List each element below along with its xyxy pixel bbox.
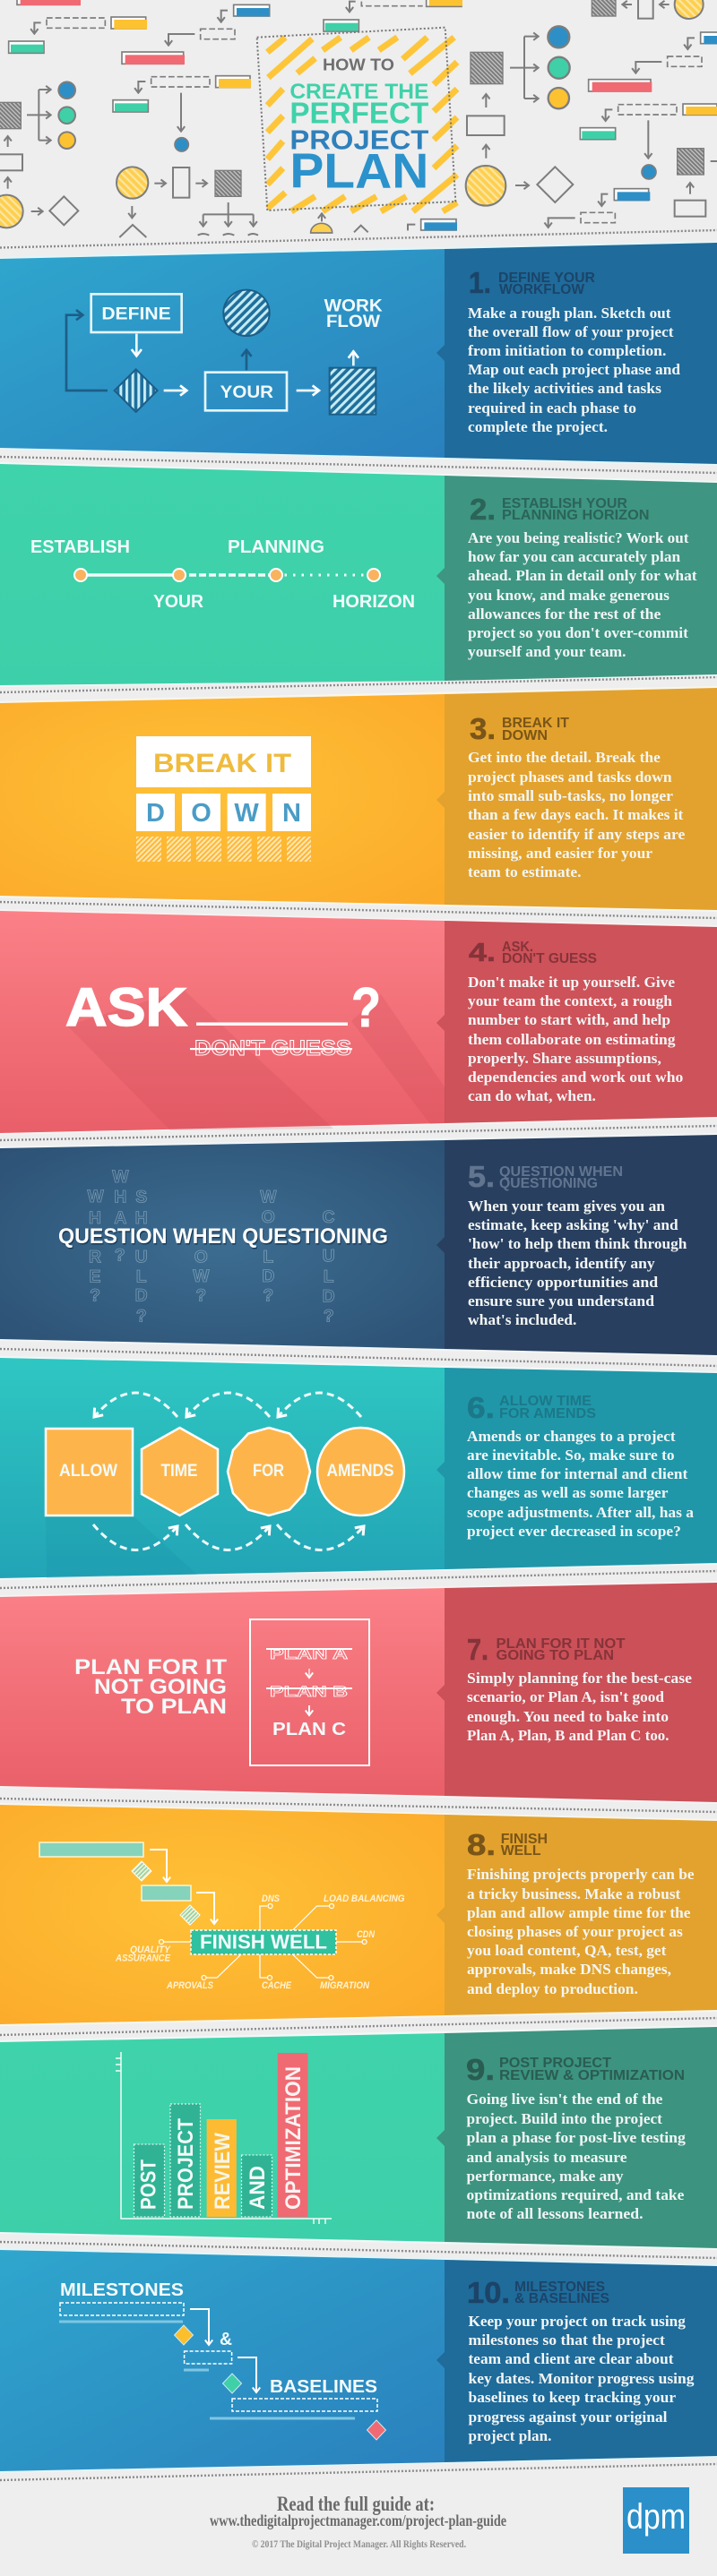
heading: WELL bbox=[501, 1843, 541, 1859]
heading: 6. bbox=[467, 1391, 495, 1424]
heading text: PLAN bbox=[289, 143, 428, 198]
outlined question words: W bbox=[260, 1189, 277, 1207]
body text: into small sub-tasks, no longer bbox=[468, 787, 673, 804]
workflow diagram: YOUR bbox=[220, 383, 273, 402]
body text bbox=[468, 305, 681, 435]
outlined question words: ? bbox=[195, 1287, 206, 1306]
outlined question words: E bbox=[90, 1268, 101, 1287]
panel 4: ask, don't guess bbox=[0, 911, 717, 1133]
outlined question words: R bbox=[89, 1248, 101, 1267]
outlined question words: ? bbox=[115, 1247, 125, 1266]
panel 10: milestones and baselines bbox=[0, 2250, 717, 2471]
body text: changes as well as some larger bbox=[467, 1484, 669, 1501]
callout notch bbox=[436, 1684, 445, 1702]
plan card: PLAN C bbox=[272, 1720, 346, 1739]
outlined question words: ? bbox=[263, 1287, 273, 1306]
callout notch bbox=[436, 344, 445, 362]
body text: yourself and your team. bbox=[468, 643, 626, 660]
outlined question words: ? bbox=[90, 1287, 100, 1306]
heading: QUESTIONING bbox=[499, 1176, 598, 1191]
heading: 7. bbox=[467, 1633, 488, 1666]
long shadow bbox=[46, 1516, 197, 1578]
panel 3: break it down bbox=[0, 688, 717, 910]
body text: them collaborate on estimating bbox=[468, 1031, 676, 1048]
outlined question words: D bbox=[323, 1287, 335, 1306]
workflow diagram: WORK bbox=[324, 297, 383, 316]
ask graphic: ? bbox=[351, 977, 381, 1039]
milestones diagram bbox=[59, 2280, 385, 2440]
outlined question words: U bbox=[135, 1248, 148, 1267]
outlined question words: L bbox=[324, 1268, 334, 1287]
outlined question words: W bbox=[112, 1168, 129, 1187]
body text: you load content, QA, test, get bbox=[467, 1942, 667, 1959]
panel 5: question when questioning bbox=[0, 1135, 717, 1355]
top connector shapes bbox=[324, 0, 462, 31]
body text: allowances for the rest of the bbox=[468, 605, 661, 623]
body text: dependencies and work out who bbox=[468, 1069, 683, 1086]
title block bbox=[257, 0, 462, 233]
milestones diagram: MILESTONES bbox=[60, 2280, 184, 2300]
outlined question words: O bbox=[262, 1208, 275, 1227]
body text bbox=[468, 529, 697, 660]
callout notch bbox=[436, 1236, 445, 1254]
heading: FINISH bbox=[501, 1832, 548, 1847]
timeline: HORIZON bbox=[333, 592, 415, 612]
heading: PLAN FOR IT NOT bbox=[497, 1636, 626, 1652]
heading bbox=[470, 712, 569, 745]
body text: estimate, keep asking 'why' and bbox=[468, 1216, 678, 1233]
heading bbox=[467, 1633, 626, 1666]
body text: ahead. Plan in detail only for what bbox=[468, 567, 697, 584]
body text: ensure sure you understand bbox=[468, 1292, 655, 1309]
finish well mind map: DNS bbox=[262, 1893, 281, 1904]
headline: QUESTION WHEN QUESTIONING bbox=[58, 1224, 388, 1249]
body text: Going live isn't the end of the bbox=[466, 2091, 663, 2108]
body text: their approach, identify any bbox=[468, 1255, 655, 1272]
finish well mind map: FINISH WELL bbox=[200, 1931, 327, 1953]
bar: optimization: OPTIMIZATION bbox=[281, 2066, 306, 2210]
shape: time bbox=[142, 1428, 218, 1516]
body text bbox=[468, 749, 686, 880]
panel 6: allow time for amends bbox=[0, 1358, 717, 1578]
callout notch bbox=[436, 2351, 445, 2369]
heading: DEFINE YOUR bbox=[498, 270, 595, 286]
break it down graphic: N bbox=[282, 799, 301, 828]
finish well mind map: LOAD BALANCING bbox=[324, 1893, 405, 1904]
outlined question words: S bbox=[135, 1189, 147, 1207]
ask graphic: ASK bbox=[65, 977, 187, 1037]
body text: complete the project. bbox=[468, 418, 608, 435]
body text: optimizations required, and take bbox=[466, 2186, 685, 2203]
finish well mind map: CDN bbox=[357, 1929, 376, 1940]
body text bbox=[466, 2091, 686, 2222]
body text: key dates. Monitor progress using bbox=[468, 2370, 695, 2387]
heading: & BASELINES bbox=[514, 2291, 609, 2306]
heading: DON'T GUESS bbox=[502, 951, 597, 966]
body text: Simply planning for the best-case bbox=[467, 1670, 692, 1687]
heading: DOWN bbox=[502, 728, 548, 743]
heading text: CREATE THE bbox=[289, 80, 428, 104]
body text: from initiation to completion. bbox=[468, 342, 666, 359]
callout notch bbox=[436, 567, 445, 585]
outlined question words: L bbox=[263, 1248, 273, 1267]
outlined question words: ? bbox=[324, 1308, 334, 1327]
timeline: YOUR bbox=[153, 592, 204, 612]
body text: Make a rough plan. Sketch out bbox=[468, 305, 671, 322]
body text: progress against your original bbox=[468, 2409, 668, 2426]
body text: the overall flow of your project bbox=[468, 323, 674, 340]
heading: QUESTION WHEN bbox=[499, 1164, 623, 1180]
body text: a tricky business. Make a robust bbox=[467, 1885, 681, 1902]
left statement bbox=[74, 1655, 227, 1719]
heading bbox=[467, 2276, 609, 2309]
panel 7: plan for it not going to plan bbox=[0, 1583, 717, 1802]
outlined question words bbox=[88, 1168, 335, 1327]
body text: missing, and easier for your bbox=[468, 845, 652, 862]
outlined question words: C bbox=[323, 1208, 335, 1227]
outlined question words: H bbox=[135, 1209, 148, 1228]
heading: 3. bbox=[470, 712, 496, 745]
body text: team and client are clear about bbox=[468, 2350, 674, 2367]
footer text: www.thedigitalprojectmanager.com/project-plan-guide bbox=[210, 2512, 506, 2529]
break it down graphic: D bbox=[146, 799, 165, 828]
bottom connector shapes bbox=[311, 213, 457, 233]
footer bbox=[210, 2487, 689, 2554]
body text: the likely activities and tasks bbox=[468, 380, 661, 397]
body text: Finishing projects properly can be bbox=[467, 1866, 695, 1883]
heading: POST PROJECT bbox=[499, 2056, 611, 2071]
heading: ESTABLISH YOUR bbox=[502, 496, 627, 511]
heading: PLANNING HORIZON bbox=[502, 508, 649, 523]
left statement: TO PLAN bbox=[121, 1695, 227, 1719]
plan card bbox=[250, 1619, 369, 1765]
finish well mind map: MIGRATION bbox=[320, 1980, 370, 1991]
callout notch bbox=[436, 1906, 445, 1924]
finish well mind map bbox=[115, 1893, 405, 1991]
body text: project plan. bbox=[468, 2427, 551, 2444]
body text: project. Build into the project bbox=[466, 2110, 662, 2127]
body text: and deploy to production. bbox=[467, 1980, 638, 1997]
dpm logo: dpm bbox=[626, 2497, 686, 2537]
heading bbox=[467, 1828, 548, 1861]
heading bbox=[468, 1160, 623, 1193]
shape: amends: AMENDS bbox=[326, 1462, 394, 1481]
heading: 9. bbox=[466, 2053, 495, 2086]
dpm logo bbox=[623, 2487, 689, 2554]
dotted frame bbox=[257, 28, 455, 210]
long shadows bbox=[67, 990, 445, 1130]
heading bbox=[467, 1391, 596, 1424]
outlined question words: H bbox=[89, 1209, 101, 1228]
bar: post: POST bbox=[136, 2160, 161, 2210]
finish well mind map: CACHE bbox=[262, 1980, 292, 1991]
break it down graphic bbox=[136, 736, 311, 862]
left statement: NOT GOING bbox=[94, 1675, 227, 1699]
body text: Map out each project phase and bbox=[468, 361, 681, 378]
bar: and bbox=[242, 2155, 272, 2217]
body text: Keep your project on track using bbox=[468, 2313, 686, 2330]
heading: 10. bbox=[467, 2276, 510, 2309]
body text: number to start with, and help bbox=[468, 1011, 670, 1028]
heading: GOING TO PLAN bbox=[497, 1648, 614, 1663]
body text: project phases and tasks down bbox=[468, 769, 672, 786]
bar: project: PROJECT bbox=[174, 2118, 198, 2210]
outlined question words: H bbox=[114, 1189, 126, 1207]
workflow diagram bbox=[66, 290, 383, 415]
heading: 1. bbox=[469, 266, 491, 299]
shape: for bbox=[228, 1428, 310, 1516]
body text: scope adjustments. After all, has a bbox=[467, 1504, 694, 1521]
outlined question words: W bbox=[193, 1267, 210, 1286]
timeline bbox=[30, 537, 415, 612]
outlined question words: D bbox=[262, 1267, 274, 1286]
body text: plan and allow ample time for the bbox=[467, 1904, 691, 1921]
left statement: PLAN FOR IT bbox=[74, 1655, 227, 1679]
outlined question words: A bbox=[114, 1209, 126, 1228]
body text: milestones so that the project bbox=[468, 2331, 665, 2348]
gantt steps bbox=[39, 1842, 214, 1925]
body text: approvals, make DNS changes, bbox=[467, 1961, 671, 1978]
callout notch bbox=[436, 1014, 445, 1032]
heading: 4. bbox=[469, 939, 496, 967]
body text: project so you don't over-commit bbox=[468, 624, 688, 641]
body text: note of all lessons learned. bbox=[466, 2205, 644, 2222]
bar: review: REVIEW bbox=[211, 2133, 235, 2210]
plan card: PLAN B bbox=[270, 1683, 348, 1700]
body text: closing phases of your project as bbox=[467, 1923, 683, 1940]
heading bbox=[470, 493, 649, 526]
workflow diagram: FLOW bbox=[326, 313, 381, 331]
body text: team to estimate. bbox=[468, 863, 581, 880]
timeline: PLANNING bbox=[228, 537, 324, 557]
milestones diagram: BASELINES bbox=[270, 2377, 377, 2397]
break it down graphic: O bbox=[191, 799, 212, 828]
timeline: ESTABLISH bbox=[30, 537, 130, 557]
panel 9: post project review and optimization bbox=[0, 2027, 717, 2248]
heading: BREAK IT bbox=[502, 716, 569, 731]
heading text: PROJECT bbox=[289, 125, 429, 156]
body text: enough. You need to bake into bbox=[467, 1708, 669, 1725]
heading: 2. bbox=[470, 493, 496, 526]
finish well mind map: ASSURANCE bbox=[115, 1953, 171, 1963]
body text: your team the context, a rough bbox=[468, 992, 673, 1009]
body text: easier to identify if any steps are bbox=[468, 826, 686, 843]
body text: plan a phase for post-live testing bbox=[466, 2129, 686, 2146]
body text: Are you being realistic? Work out bbox=[468, 529, 689, 546]
body text: scenario, or Plan A, isn't good bbox=[467, 1688, 665, 1705]
heading: ASK. bbox=[502, 940, 533, 955]
body text bbox=[467, 1670, 692, 1744]
heading: 5. bbox=[468, 1160, 495, 1193]
bar: post bbox=[134, 2144, 165, 2217]
body text: allow time for internal and client bbox=[467, 1465, 688, 1482]
body text: Don't make it up yourself. Give bbox=[468, 974, 675, 991]
heading text bbox=[289, 55, 429, 198]
body text bbox=[468, 974, 683, 1104]
heading bbox=[469, 939, 597, 967]
body text: project ever decreased in scope? bbox=[467, 1523, 681, 1540]
body text bbox=[467, 1428, 694, 1540]
body text: than a few days each. It makes it bbox=[468, 806, 684, 823]
ask graphic: DON'T GUESS bbox=[194, 1036, 351, 1060]
body text: baselines to keep tracking your bbox=[468, 2389, 677, 2406]
body text: are inevitable. So, make sure to bbox=[467, 1447, 675, 1464]
body text: required in each phase to bbox=[468, 399, 636, 416]
callout notch bbox=[436, 2129, 445, 2147]
body text: you know, and make generous bbox=[468, 587, 669, 604]
footer text: Read the full guide at: bbox=[277, 2493, 435, 2515]
body text: properly. Share assumptions, bbox=[468, 1050, 661, 1067]
header illustration left bbox=[0, 0, 270, 237]
callout notch bbox=[436, 1461, 445, 1479]
body text: and analysis to measure bbox=[466, 2149, 627, 2166]
shape: allow: ALLOW bbox=[59, 1462, 117, 1481]
plan card: PLAN A bbox=[270, 1645, 348, 1662]
shape: time: TIME bbox=[161, 1462, 197, 1481]
panel 1: define your workflow bbox=[0, 243, 717, 464]
heading: FOR AMENDS bbox=[499, 1406, 596, 1421]
body text bbox=[467, 1866, 695, 1997]
outlined question words: ? bbox=[136, 1308, 147, 1327]
headline: QUESTION WHEN QUESTIONING bbox=[59, 1225, 389, 1250]
dashed loop arrows bbox=[93, 1393, 364, 1550]
shape: allow bbox=[46, 1429, 133, 1516]
workflow diagram: DEFINE bbox=[101, 305, 171, 324]
heading bbox=[466, 2053, 685, 2086]
bar chart bbox=[116, 2052, 332, 2224]
callout notch bbox=[436, 791, 445, 809]
shape: for: FOR bbox=[253, 1462, 284, 1481]
body text: 'how' to help them think through bbox=[468, 1235, 687, 1252]
outlined question words: U bbox=[323, 1247, 335, 1266]
milestones diagram: & bbox=[220, 2330, 232, 2349]
body text bbox=[468, 1198, 687, 1328]
footer text bbox=[210, 2493, 506, 2550]
panel 8: finish well bbox=[0, 1805, 717, 2024]
body text: performance, make any bbox=[466, 2168, 624, 2185]
outlined question words: W bbox=[88, 1188, 105, 1206]
heading: ALLOW TIME bbox=[499, 1394, 592, 1409]
ask graphic bbox=[65, 977, 381, 1060]
heading: MILESTONES bbox=[514, 2280, 605, 2295]
body text: Amends or changes to a project bbox=[467, 1428, 676, 1445]
shape: amends bbox=[317, 1428, 404, 1516]
heading text: HOW TO bbox=[323, 55, 394, 73]
body text: how far you can accurately plan bbox=[468, 548, 681, 565]
outlined question words: O bbox=[194, 1248, 208, 1267]
break it down graphic: W bbox=[234, 799, 259, 828]
yellow hatch frame bbox=[267, 38, 457, 211]
panel 2: establish your planning horizon bbox=[0, 464, 717, 685]
break it down graphic: BREAK IT bbox=[153, 749, 291, 778]
bar: and: AND bbox=[246, 2166, 270, 2210]
footer text: © 2017 The Digital Project Manager. All Rights Reserved. bbox=[252, 2539, 466, 2550]
body text: When your team gives you an bbox=[468, 1198, 666, 1215]
body text bbox=[468, 2313, 695, 2444]
body text: what's included. bbox=[468, 1311, 576, 1328]
header illustration right bbox=[466, 0, 717, 228]
heading: REVIEW & OPTIMIZATION bbox=[499, 2068, 685, 2083]
finish well mind map: QUALITY bbox=[130, 1945, 172, 1955]
heading bbox=[469, 266, 595, 299]
heading: 8. bbox=[467, 1828, 496, 1861]
finish well mind map: APROVALS bbox=[166, 1980, 214, 1991]
body text: Plan A, Plan, B and Plan C too. bbox=[467, 1727, 669, 1744]
body text: efficiency opportunities and bbox=[468, 1274, 659, 1291]
heading: WORKFLOW bbox=[499, 282, 585, 297]
outlined question words: D bbox=[135, 1287, 148, 1306]
heading text: PERFECT bbox=[289, 97, 428, 130]
outlined question words: L bbox=[136, 1268, 147, 1287]
body text: Get into the detail. Break the bbox=[468, 749, 661, 766]
body text: can do what, when. bbox=[468, 1087, 596, 1104]
